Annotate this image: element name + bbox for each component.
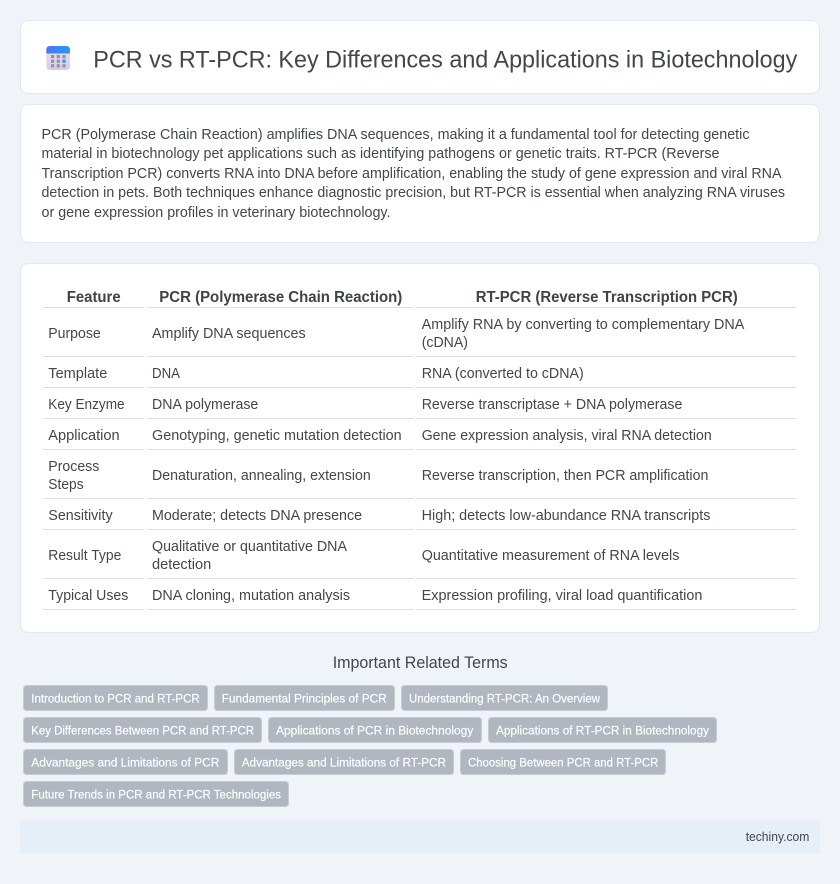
table header row [67,289,738,306]
table header row: RT-PCR (Reverse Transcription PCR) [476,289,738,306]
table row: Result Type: Result Type [48,548,121,564]
table row: Process Steps: Steps [48,477,84,493]
table row: Result Type: detection [152,557,211,573]
tag [24,750,228,774]
footer site name: techiny.com [746,829,809,844]
panel: introduction [20,104,820,242]
table row: Process Steps: Denaturation, annealing, extension [152,468,371,484]
tag [24,782,288,806]
table row: Template: Template [48,366,107,382]
tag [24,718,262,742]
table row: Result Type: Quantitative measurement of RNA levels [422,548,679,564]
table row: Process Steps: Reverse transcription, then PCR amplification [422,468,708,484]
table row: Sensitivity: Sensitivity [48,508,113,524]
tag [488,718,716,742]
panel: header [20,20,820,94]
table row: Typical Uses: Expression profiling, viral load quantification [422,588,702,604]
table row: Application: Application [48,428,120,444]
table row: Process Steps [48,459,708,493]
table row: Purpose: Amplify RNA by converting to complementary DNA [422,317,745,333]
table row: Result Type [48,539,679,573]
table header row: Feature [67,289,121,306]
table row: Typical Uses: DNA cloning, mutation analysis [152,588,350,604]
title: PCR vs RT-PCR: Key Differences and Applications in Biotechnology [93,46,798,73]
table row: Typical Uses: Typical Uses [48,588,128,604]
text block: introduction paragraph: detection in pets. Both techniques enhance diagnostic precision, but RT-PCR is essential when analyzing RNA viruses [42,185,785,201]
heading: important related terms: Important Related Terms [333,654,508,672]
tag [234,750,454,774]
table row: Purpose [48,317,745,351]
table row: Purpose: Purpose [48,326,101,342]
tag: Fundamental Principles of PCR [222,691,387,705]
tag [460,750,666,774]
table row: Key Enzyme [48,397,682,413]
tag: Introduction to PCR and RT-PCR [31,691,200,705]
tag: Applications of PCR in Biotechnology [276,723,474,737]
table row: Template: DNA [152,366,180,382]
table row: Application: Gene expression analysis, viral RNA detection [422,428,712,444]
tag [402,686,608,710]
text block: introduction paragraph [42,127,785,221]
table row: Application: Genotyping, genetic mutation detection [152,428,402,444]
table header row: PCR (Polymerase Chain Reaction) [159,289,402,306]
icon: calendar grid [46,46,70,70]
related terms tags [24,686,716,806]
tag: Choosing Between PCR and RT-PCR [468,755,658,769]
table row: Sensitivity: Moderate; detects DNA presence [152,508,362,524]
table row: Purpose: Amplify DNA sequences [152,326,306,342]
table row: Template [48,366,584,382]
panel: comparison table [20,264,820,632]
tag: Advantages and Limitations of RT-PCR [242,755,446,769]
tag: Key Differences Between PCR and RT-PCR [31,723,254,737]
table row: Process Steps: Process [48,459,99,475]
text block: introduction paragraph: material in biotechnology pet applications such as identifying pathogens or genetic traits. RT-PCR (Reverse [42,146,720,162]
table row: Sensitivity: High; detects low-abundance RNA transcripts [422,508,710,524]
tag: Future Trends in PCR and RT-PCR Technologies [31,787,281,801]
table row: Typical Uses [48,588,702,604]
table row: Key Enzyme: Key Enzyme [48,397,125,413]
tag [268,718,482,742]
table row: Key Enzyme: DNA polymerase [152,397,258,413]
tag [24,686,208,710]
table row: Application [48,428,712,444]
table row: Sensitivity [48,508,710,524]
text block: introduction paragraph: PCR (Polymerase Chain Reaction) amplifies DNA sequences, making it a fundamental tool for detecting genetic [42,127,750,143]
table row: Result Type: Qualitative or quantitative DNA [152,539,347,555]
table row: Template: RNA (converted to cDNA) [422,366,584,382]
tag: Understanding RT-PCR: An Overview [409,691,600,705]
text block: introduction paragraph: Transcription PCR) converts RNA into DNA before amplification, enabling the study of gene expression and viral RNA [42,166,782,182]
tag: Advantages and Limitations of PCR [31,755,219,769]
table row: Purpose: (cDNA) [422,335,468,351]
tag [214,686,394,710]
text block: introduction paragraph: or gene expression profiles in veterinary biotechnology. [42,205,390,221]
table row: Key Enzyme: Reverse transcriptase + DNA polymerase [422,397,682,413]
footer bar [20,820,820,854]
tag: Applications of RT-PCR in Biotechnology [496,723,710,737]
